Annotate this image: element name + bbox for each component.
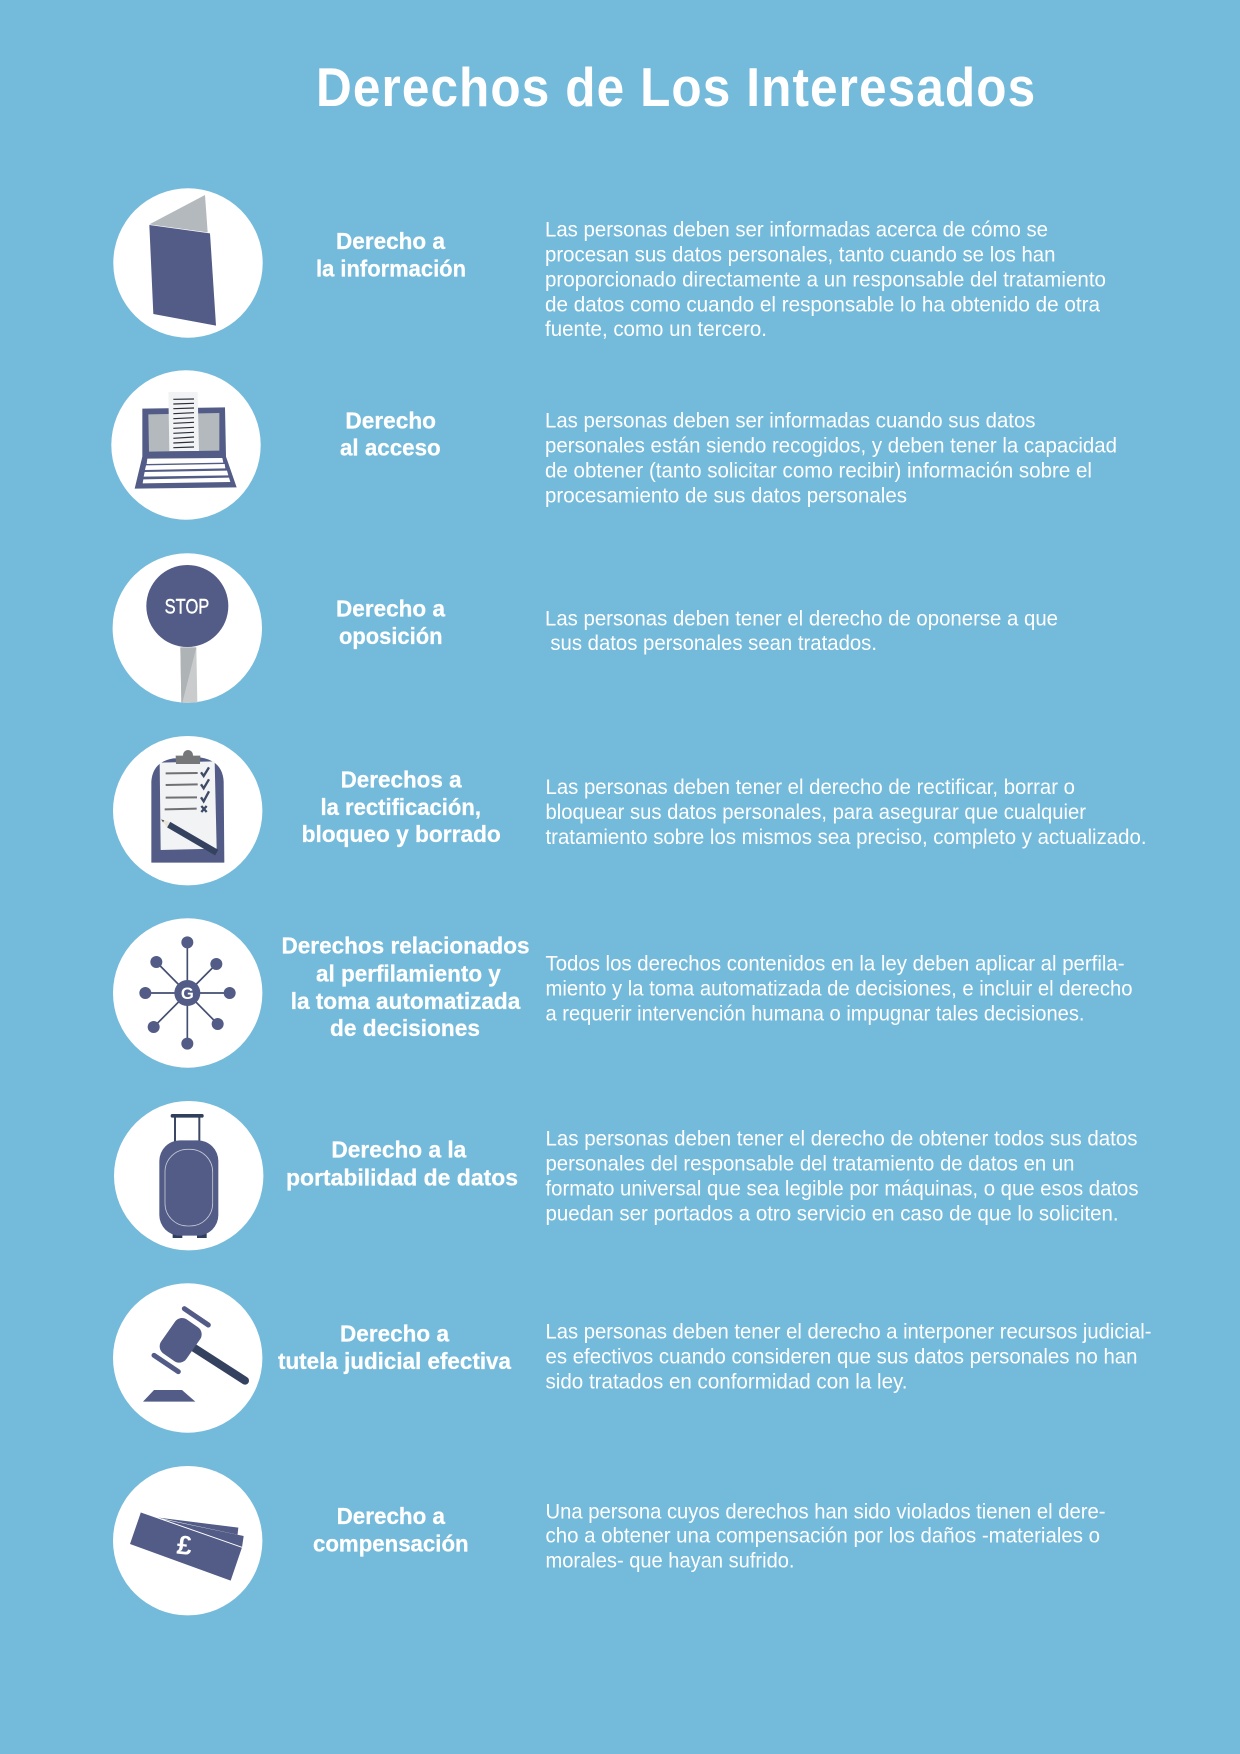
heading: Derecho	[345, 407, 436, 433]
description	[545, 607, 1058, 655]
description: sido tratados en conformidad con la ley.	[546, 1371, 908, 1394]
heading: Derecho a	[337, 1503, 445, 1529]
description	[546, 776, 1146, 849]
heading: Derechos relacionados	[282, 933, 530, 959]
heading: de decisiones	[330, 1015, 480, 1041]
description	[545, 219, 1106, 341]
icon: clipboard with checklist	[113, 736, 262, 885]
description: Las personas deben tener el derecho de oponerse a que	[545, 607, 1058, 630]
description: personales del responsable del tratamiento de datos en un	[546, 1152, 1074, 1175]
panel: derecho a la información	[113, 188, 1106, 341]
heading: oposición	[339, 623, 442, 649]
heading: la información	[316, 256, 466, 282]
icon: folded leaflet	[113, 188, 263, 338]
description: a requerir intervención humana o impugnar tales decisiones.	[546, 1003, 1084, 1026]
heading: compensación	[313, 1531, 469, 1557]
heading: Derecho a	[336, 228, 445, 254]
heading: al acceso	[340, 435, 441, 461]
description	[546, 1500, 1106, 1573]
description: morales- que hayan sufrido.	[546, 1550, 794, 1573]
icon: laptop with document	[111, 370, 261, 520]
title: Derechos de Los Interesados	[316, 58, 1035, 119]
panel: derecho a tutela judicial efectiva	[113, 1283, 1152, 1433]
description: Las personas deben ser informadas cuando sus datos	[545, 409, 1036, 432]
heading: Derechos a	[341, 766, 462, 792]
icon: stop sign	[113, 553, 262, 703]
heading	[282, 933, 530, 1041]
heading: portabilidad de datos	[286, 1164, 518, 1190]
description: Las personas deben ser informadas acerca de cómo se	[545, 219, 1048, 242]
description: formato universal que sea legible por máquinas, o que esos datos	[546, 1177, 1138, 1200]
icon: banknotes	[113, 1466, 262, 1615]
description: personales están siendo recogidos, y deben tener la capacidad	[545, 434, 1117, 457]
description: procesamiento de sus datos personales	[545, 484, 907, 507]
heading	[316, 228, 466, 282]
description: Las personas deben tener el derecho a interponer recursos judicial-	[546, 1321, 1152, 1344]
heading: al perfilamiento y	[316, 960, 501, 986]
panel: derechos a la rectificación, bloqueo y borrado	[113, 736, 1146, 885]
description	[546, 1321, 1152, 1394]
panel: derecho a compensación	[113, 1466, 1106, 1615]
heading: Derecho a	[336, 596, 445, 622]
icon: gavel	[113, 1283, 262, 1433]
heading: tutela judicial efectiva	[278, 1348, 511, 1374]
heading: la rectificación,	[320, 794, 481, 820]
heading	[340, 407, 441, 461]
heading: Derecho a	[340, 1320, 449, 1346]
heading: bloqueo y borrado	[302, 821, 501, 847]
icon: network hub	[113, 918, 262, 1068]
heading	[302, 766, 501, 847]
icon: suitcase	[114, 1101, 263, 1250]
description: bloquear sus datos personales, para asegurar que cualquier	[546, 801, 1086, 824]
description: es efectivos cuando consideren que sus datos personales no han	[546, 1346, 1138, 1369]
description: Las personas deben tener el derecho de obtener todos sus datos	[546, 1127, 1138, 1150]
description: sus datos personales sean tratados.	[550, 632, 877, 655]
description: miento y la toma automatizada de decisiones, e incluir el derecho	[546, 978, 1132, 1001]
heading: la toma automatizada	[291, 988, 520, 1014]
icon: stop sign: STOP	[165, 595, 209, 619]
description: cho a obtener una compensación por los daños -materiales o	[546, 1525, 1100, 1548]
description	[546, 1127, 1138, 1225]
heading	[313, 1503, 469, 1557]
heading	[286, 1137, 518, 1190]
description	[545, 409, 1117, 507]
description: de datos como cuando el responsable lo ha obtenido de otra	[545, 294, 1100, 317]
panel: derecho a la portabilidad de datos	[114, 1101, 1138, 1250]
icon: network hub: G	[181, 984, 194, 1003]
heading	[336, 596, 445, 649]
panel: derecho a oposición	[113, 553, 1058, 703]
description	[546, 953, 1132, 1026]
description: puedan ser portados a otro servicio en caso de que lo soliciten.	[546, 1202, 1118, 1225]
description: fuente, como un tercero.	[545, 318, 767, 341]
description: Las personas deben tener el derecho de rectificar, borrar o	[546, 776, 1075, 799]
panel: derechos relacionados al perfilamiento	[113, 918, 1132, 1068]
heading	[278, 1320, 511, 1374]
description: procesan sus datos personales, tanto cuando se los han	[545, 244, 1056, 267]
description: tratamiento sobre los mismos sea preciso, completo y actualizado.	[546, 826, 1146, 849]
description: de obtener (tanto solicitar como recibir) información sobre el	[545, 459, 1092, 482]
description: Todos los derechos contenidos en la ley deben aplicar al perfila-	[546, 953, 1125, 976]
panel: derecho al acceso	[111, 370, 1117, 520]
description: proporcionado directamente a un responsable del tratamiento	[545, 269, 1106, 292]
icon: banknotes: £	[175, 1530, 194, 1561]
heading: Derecho a la	[331, 1137, 466, 1163]
description: Una persona cuyos derechos han sido violados tienen el dere-	[546, 1500, 1106, 1523]
